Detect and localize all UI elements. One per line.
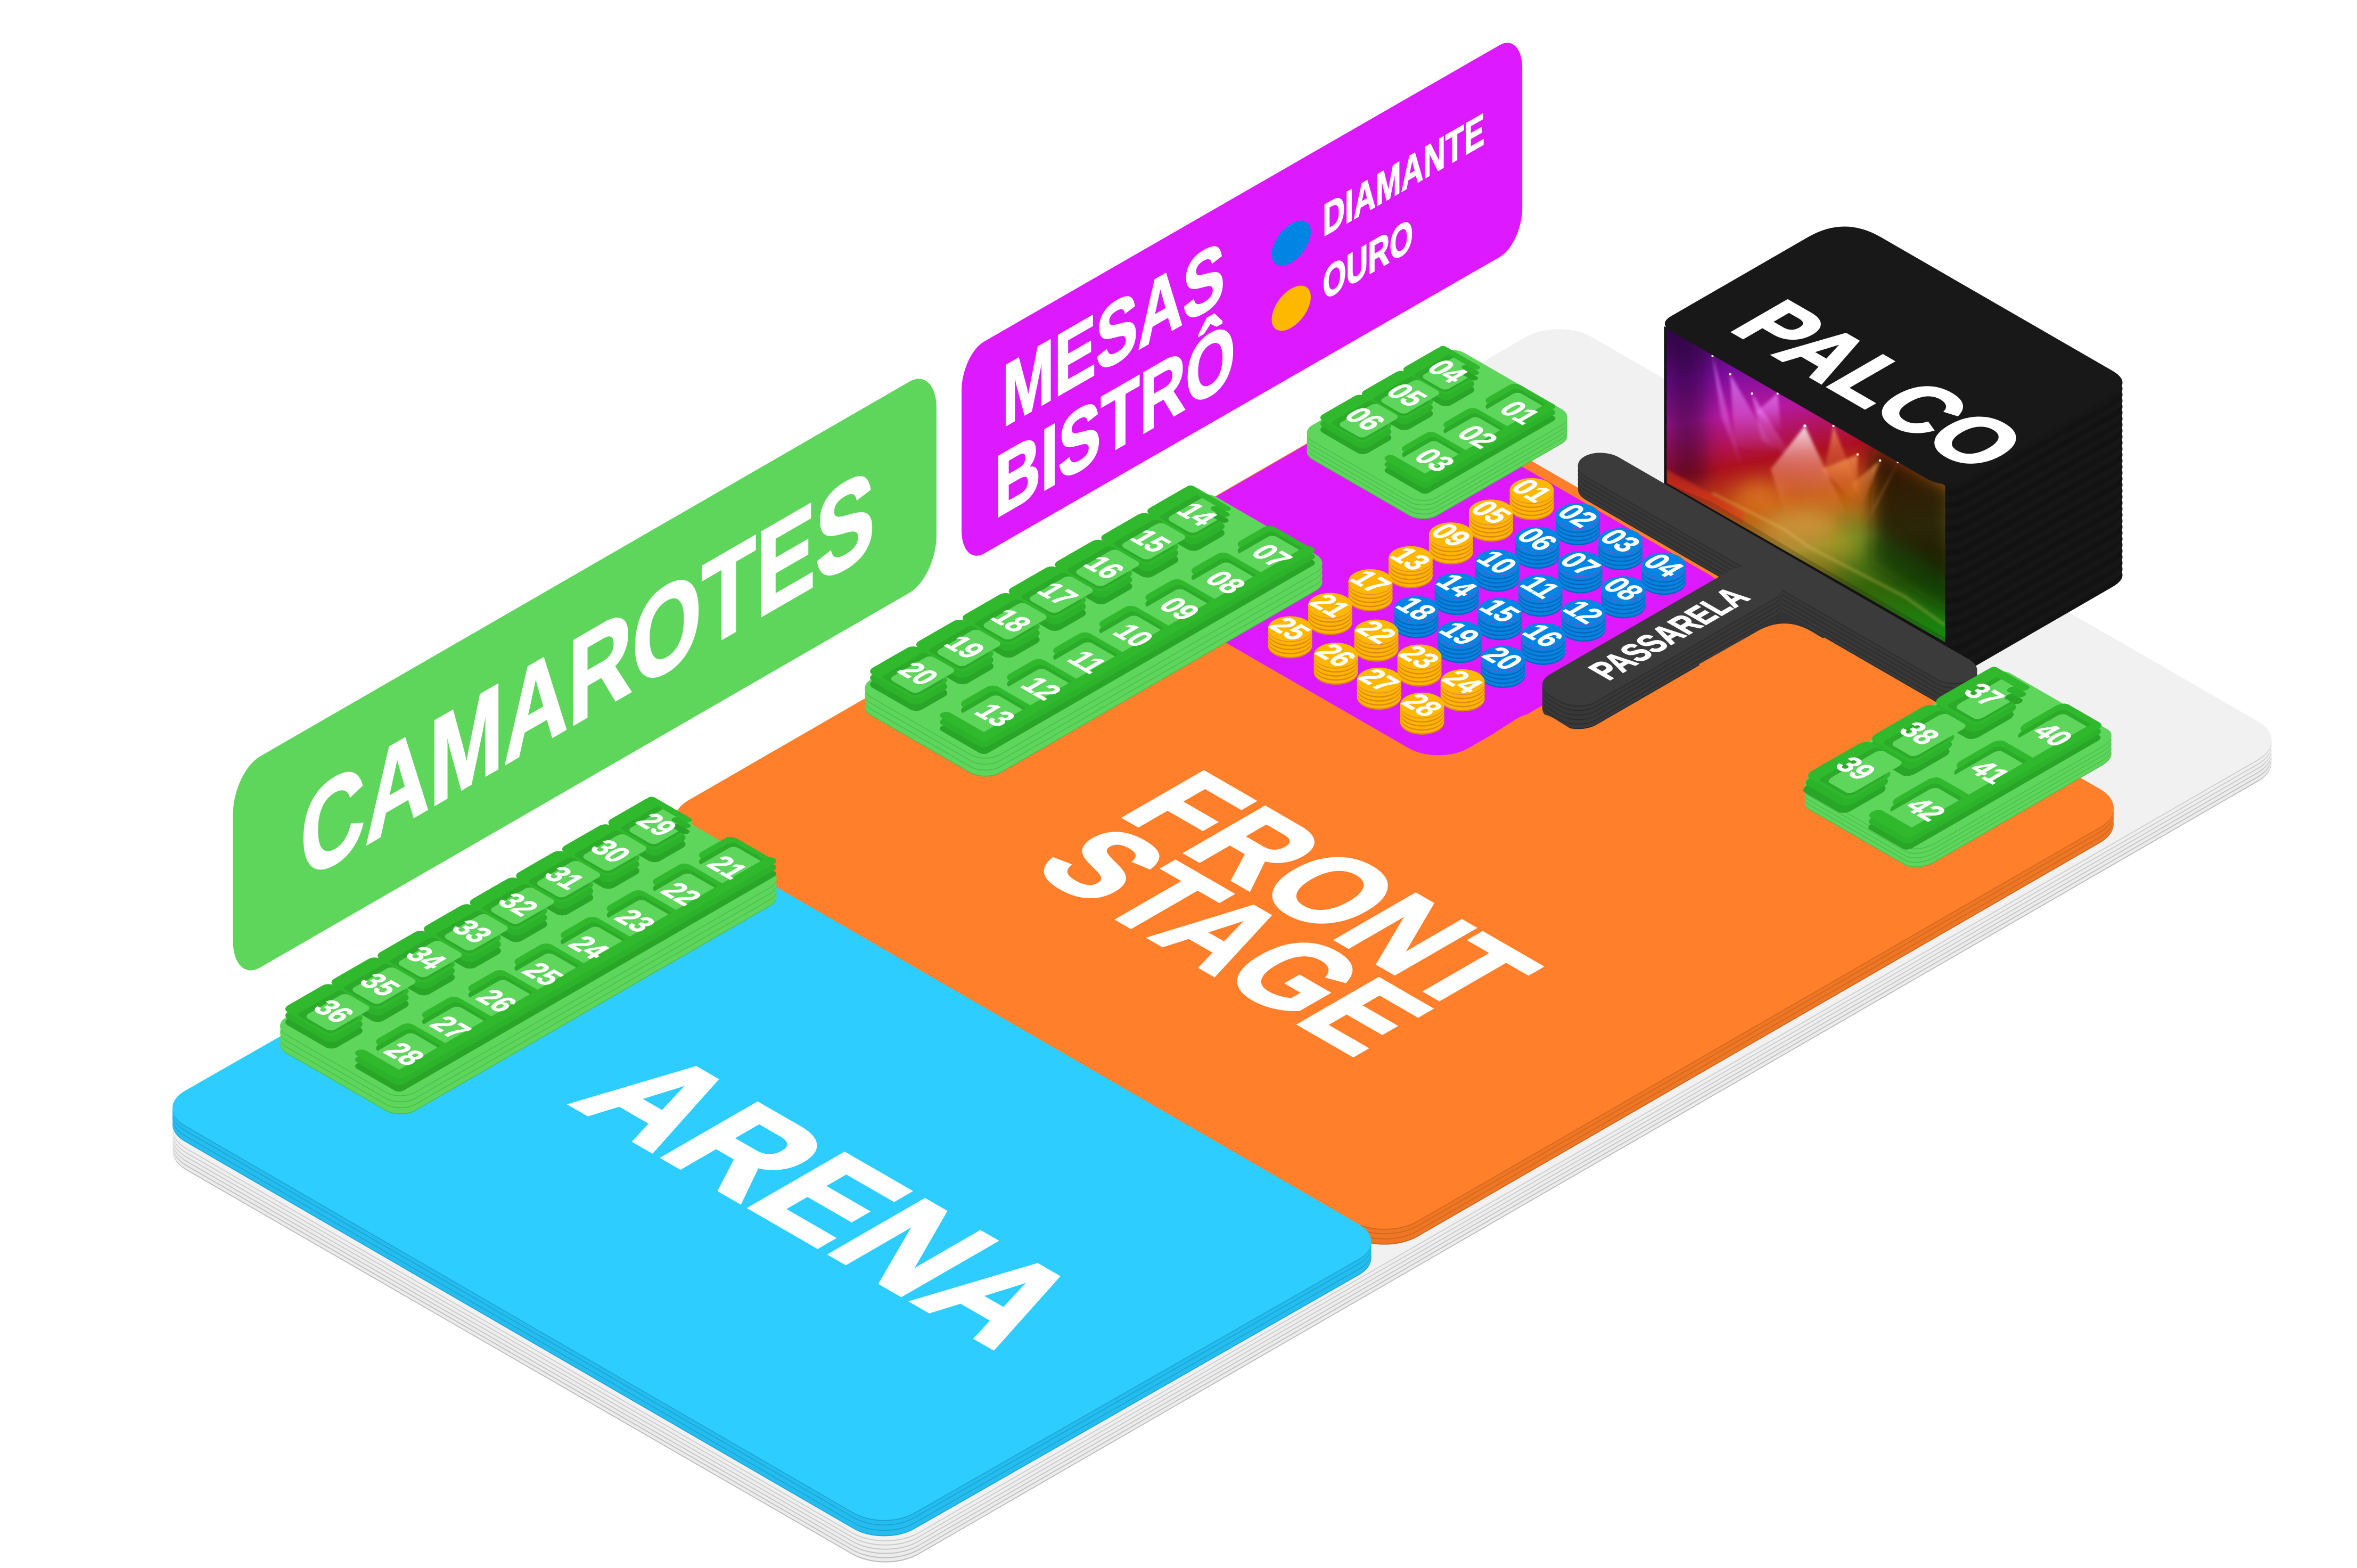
mesas bistro tables: gold and diamond chip stacks: 07 (1552, 548, 1608, 580)
camarotes block 01-06: 02 (1450, 421, 1506, 453)
panel: camarotes sign (233, 366, 937, 983)
camarotes block 21-36: 24 (561, 931, 617, 964)
mesas bistro tables: gold and diamond chip stacks: 04 (1636, 549, 1691, 581)
camarotes block 37-42: 37 (1956, 678, 2012, 711)
camarotes block 07-20: 08 (1197, 566, 1253, 598)
heading: ARENA: ARENA (539, 1031, 1121, 1367)
legend: ouro: OURO (1323, 208, 1413, 310)
camarotes block 21-36: 21 (700, 851, 755, 883)
camarotes block 07-20: 14 (1169, 498, 1225, 530)
camarotes block 21-36: 35 (352, 968, 408, 1001)
mesas bistro tables: gold and diamond chip stacks: 01 (1504, 474, 1559, 507)
camarotes block 21-36: 23 (607, 905, 663, 937)
camarotes block 07-20: 19 (937, 631, 993, 663)
camarotes block 07-20: 20 (890, 658, 946, 689)
camarotes block 07-20: 07 (1244, 539, 1300, 572)
mesas bistro tables: gold and diamond chip stacks: 03 (1592, 524, 1648, 557)
heading: FRONT STAGE: STAGE (1005, 809, 1461, 1072)
catwalk: passarela (1360, 447, 1987, 832)
camarotes block 37-42 (1789, 663, 2120, 872)
heading: CAMAROTES: CAMAROTES (301, 441, 875, 909)
camarotes block 07-20: 10 (1105, 619, 1161, 652)
camarotes block 37-42: 41 (1962, 756, 2018, 789)
mesas bistro tables: gold and diamond chip stacks: 24 (1434, 666, 1490, 698)
base plate: grey venue floor (153, 318, 2291, 1568)
camarotes block 07-20 (852, 480, 1331, 782)
heading: FRONT STAGE: FRONT (1093, 753, 1567, 1028)
heading: PALCO: PALCO (1711, 288, 2048, 482)
stage lights image (1666, 328, 1945, 642)
label: PASSARELA: PASSARELA (1580, 582, 1758, 685)
panel: mesas bistro sign (962, 32, 1522, 567)
legend: diamante (1272, 103, 1484, 274)
camarotes block 01-06: 05 (1378, 379, 1434, 411)
heading: MESAS BISTRO: BISTRÔ (995, 302, 1235, 537)
mesas bistro tables: gold and diamond chip stacks: 10 (1469, 546, 1525, 578)
mesas bistro tables: gold and diamond chip stacks: 05 (1463, 496, 1519, 528)
camarotes block 01-06: 06 (1337, 403, 1393, 435)
camarotes block 21-36: 27 (423, 1011, 479, 1044)
orange edge shapes around the catwalk (1496, 623, 1864, 767)
mesas bistro tables: gold and diamond chip stacks: 23 (1391, 641, 1447, 673)
camarotes block 21-36: 30 (582, 835, 638, 867)
camarotes block 21-36: 28 (376, 1038, 432, 1070)
panel: mesas bistro floor (1094, 393, 1739, 766)
stage body (1658, 222, 2133, 683)
camarotes block 21-36 (268, 792, 790, 1119)
mesas bistro tables: gold and diamond chip stacks: 22 (1348, 616, 1404, 648)
camarotes block 37-42: 38 (1892, 717, 1948, 749)
camarotes block 07-20: 12 (1013, 672, 1069, 704)
mesas bistro tables: gold and diamond chip stacks: 26 (1308, 639, 1364, 671)
legend: diamante: DIAMANTE (1323, 103, 1484, 247)
camarotes block 21-36: 36 (306, 995, 362, 1028)
mesas bistro tables: gold and diamond chip stacks: 09 (1423, 519, 1479, 551)
mesas bistro tables: gold and diamond chip stacks: 08 (1595, 573, 1651, 605)
mesas bistro tables: gold and diamond chip stacks: 27 (1351, 664, 1407, 696)
legend: ouro (1272, 208, 1413, 339)
camarotes block 07-20: 13 (967, 699, 1023, 731)
camarotes block 21-36: 25 (515, 958, 571, 990)
stage top face (1658, 216, 2133, 490)
camarotes block 01-06: 01 (1492, 397, 1548, 429)
mesas bistro tables: gold and diamond chip stacks: 02 (1550, 499, 1606, 532)
camarotes block 07-20: 18 (983, 604, 1039, 637)
mesas bistro tables: gold and diamond chip stacks: 19 (1432, 617, 1488, 650)
heading: MESAS BISTRO (995, 221, 1235, 537)
mesas bistro tables: gold and diamond chip stacks: 06 (1509, 523, 1565, 555)
mesas bistro tables: gold and diamond chip stacks: 17 (1342, 565, 1398, 598)
mesas bistro tables: gold and diamond chip stacks: 20 (1475, 642, 1531, 675)
camarotes block 21-36: 26 (469, 984, 524, 1017)
camarotes block 37-42: 39 (1828, 752, 1884, 784)
camarotes block 07-20: 09 (1152, 593, 1208, 625)
camarotes block 07-20: 16 (1076, 551, 1132, 584)
heading: MESAS BISTRO: MESAS (1002, 221, 1225, 447)
camarotes block 01-06 (1299, 343, 1575, 524)
camarotes block 07-20: 11 (1060, 646, 1114, 678)
mesas bistro tables: gold and diamond chip stacks: 21 (1302, 589, 1358, 621)
camarotes block 21-36: 22 (653, 878, 709, 910)
mesas bistro tables: gold and diamond chip stacks (1262, 474, 1691, 735)
camarotes block 37-42: 42 (1898, 793, 1953, 826)
mesas bistro tables: gold and diamond chip stacks: 11 (1513, 571, 1567, 603)
camarotes block 01-06: 03 (1407, 444, 1463, 476)
stage box: palco (1654, 216, 2133, 683)
mesas bistro tables: gold and diamond chip stacks: 14 (1428, 569, 1484, 602)
mesas bistro tables: gold and diamond chip stacks: 15 (1472, 595, 1527, 627)
mesas bistro tables: gold and diamond chip stacks: 13 (1383, 543, 1439, 575)
mesas bistro tables: gold and diamond chip stacks: 16 (1515, 619, 1571, 652)
camarotes block 21-36: 32 (490, 889, 546, 921)
camarotes block 07-20: 17 (1030, 578, 1086, 610)
camarotes block 07-20: 15 (1123, 525, 1179, 557)
camarotes block 37-42: 40 (2025, 719, 2081, 751)
mesas bistro tables: gold and diamond chip stacks: 12 (1555, 596, 1611, 628)
panel: arena floor (155, 819, 1389, 1546)
camarotes block 21-36: 31 (537, 862, 593, 894)
camarotes block 21-36: 29 (629, 808, 685, 841)
panel: front stage floor (655, 388, 2133, 1256)
camarotes block 21-36: 34 (398, 942, 454, 974)
mesas bistro tables: gold and diamond chip stacks: 18 (1388, 593, 1444, 625)
mesas bistro tables: gold and diamond chip stacks: 25 (1262, 613, 1318, 645)
camarotes block 21-36: 33 (444, 915, 500, 947)
camarotes block 01-06: 04 (1419, 355, 1475, 388)
mesas bistro tables: gold and diamond chip stacks: 28 (1394, 689, 1450, 721)
